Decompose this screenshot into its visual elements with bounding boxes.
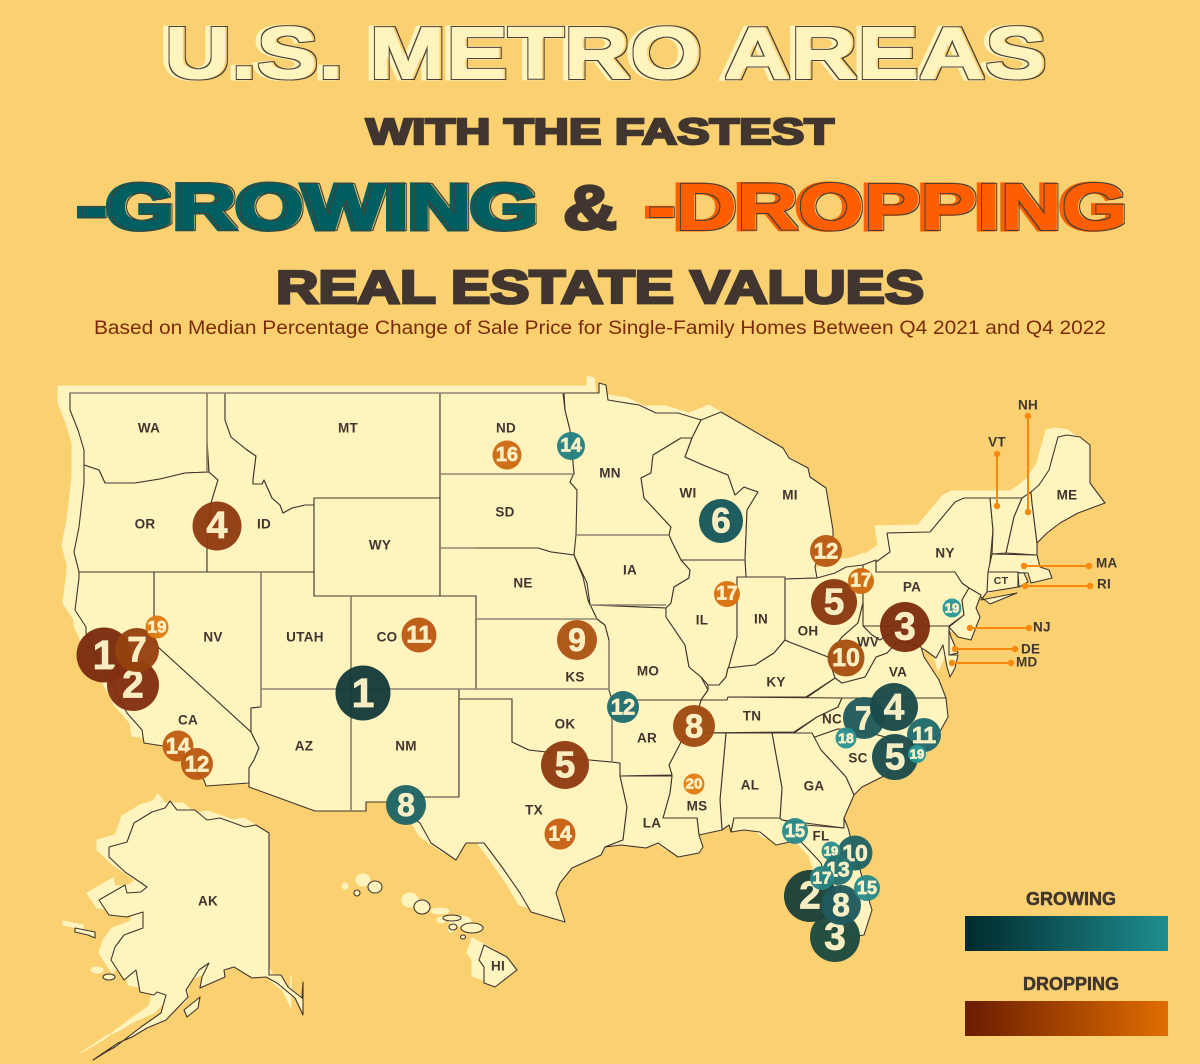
- dropping metro markers: [76, 440, 930, 850]
- dropping metro markers: 12: [814, 538, 838, 564]
- state labels: MO: [637, 664, 659, 678]
- growing metro markers: 12: [611, 694, 635, 720]
- growing metro markers: 11: [912, 722, 936, 748]
- state labels: OR: [135, 516, 155, 532]
- growing metro markers: 13: [826, 858, 850, 882]
- state labels: AK: [198, 894, 218, 908]
- US state map: [70, 383, 1105, 1060]
- growing metro markers: 1: [352, 670, 374, 716]
- state labels: CA: [178, 712, 198, 728]
- state labels: MT: [338, 420, 358, 436]
- state labels: OK: [555, 716, 575, 732]
- dropping metro markers: 19: [148, 618, 166, 636]
- dropping metro markers: 9: [568, 622, 586, 658]
- heading: -growing: -GROWING: [80, 171, 540, 243]
- state labels: WV: [857, 634, 879, 650]
- state labels: UTAH: [286, 630, 324, 644]
- dropping metro markers: 20: [686, 776, 702, 792]
- heading: real estate values: REAL ESTATE VALUES: [276, 261, 924, 313]
- state labels: KS: [565, 670, 585, 684]
- growing metro markers: 19: [945, 600, 959, 616]
- growing metro markers: 3: [824, 916, 846, 958]
- northeast pointer labels: [988, 398, 1118, 670]
- northeast pointer labels: VT: [988, 434, 1006, 450]
- state labels: IA: [623, 562, 637, 578]
- dropping metro markers: 7: [127, 630, 147, 670]
- heading: ampersand: &: [563, 174, 617, 243]
- state labels: ME: [1057, 488, 1077, 502]
- growing metro markers: 8: [397, 787, 415, 823]
- growing metro markers: 17: [813, 868, 831, 888]
- heading: -growing: -GROWING: [77, 171, 537, 243]
- northeast pointer labels: MD: [1016, 654, 1038, 670]
- dropping metro markers: 4: [206, 505, 228, 547]
- northeast pointer labels: MA: [1096, 556, 1118, 570]
- title: U.S. Metro Areas: U.S. METRO AREAS: [165, 14, 1047, 94]
- dropping metro markers: 16: [496, 444, 518, 466]
- thicker state borders: [70, 393, 669, 811]
- northeast pointer labels: RI: [1097, 576, 1111, 592]
- state labels: TX: [525, 802, 543, 818]
- legend: growing: [965, 889, 1168, 951]
- state labels: MN: [599, 466, 621, 480]
- growing metro markers: [336, 432, 962, 962]
- state labels: AZ: [295, 738, 313, 754]
- state labels: FL: [812, 828, 830, 844]
- growing metro markers: 4: [884, 686, 905, 728]
- state labels: KY: [766, 674, 786, 690]
- dropping metro markers: 5: [824, 582, 844, 622]
- state labels: LA: [643, 816, 661, 830]
- state labels: WA: [138, 420, 160, 436]
- state labels: GA: [804, 778, 824, 794]
- growing metro markers: 5: [885, 736, 905, 778]
- state labels: NE: [513, 576, 533, 590]
- northeast pointer labels: NH: [1018, 398, 1038, 412]
- growing metro markers: 6: [711, 502, 731, 540]
- state labels: NV: [203, 630, 223, 644]
- growing metro markers: 18: [838, 730, 854, 746]
- state labels: PA: [903, 580, 921, 594]
- dropping metro markers: 2: [122, 664, 144, 706]
- dropping metro markers: 10: [832, 644, 860, 672]
- growing metro markers: 8: [832, 887, 850, 923]
- state labels: AR: [637, 730, 657, 746]
- state labels: IL: [696, 612, 708, 628]
- state labels: SD: [495, 504, 515, 520]
- growing metro markers: 15: [857, 878, 877, 898]
- dropping metro markers: 17: [716, 584, 738, 604]
- state labels: MS: [687, 798, 707, 814]
- heading: -dropping: -DROPPING: [648, 171, 1128, 243]
- state labels: TN: [743, 708, 761, 724]
- state labels: IN: [754, 612, 768, 626]
- subtitle: Based on Median Percentage Change of Sale Price for Single-Family Homes Between Q4 2021 and Q4 2022: [94, 318, 1106, 339]
- legend: dropping: [965, 974, 1168, 1036]
- state labels: WY: [369, 538, 391, 552]
- legend: dropping: DROPPING: [1023, 974, 1119, 994]
- state labels: MI: [782, 488, 798, 502]
- dropping metro markers: 11: [406, 622, 432, 648]
- northeast pointer lines: [949, 413, 1093, 666]
- state labels: ID: [257, 516, 271, 532]
- dropping metro markers: 8: [685, 708, 703, 744]
- dropping metro markers: 14: [166, 734, 191, 758]
- growing metro markers: 15: [785, 821, 805, 841]
- state labels: HI: [491, 958, 505, 974]
- northeast pointer labels: NJ: [1033, 620, 1051, 634]
- state labels: [135, 420, 1077, 974]
- northeast pointer labels: DE: [1021, 642, 1040, 656]
- state labels: CO: [377, 630, 397, 644]
- state labels: WI: [679, 486, 697, 500]
- heading: -dropping: -DROPPING: [645, 171, 1125, 243]
- dropping metro markers: 1: [93, 632, 115, 678]
- growing metro markers: 19: [824, 844, 838, 858]
- growing metro markers: 10: [842, 840, 868, 866]
- state labels: CT: [994, 575, 1009, 587]
- state labels: OH: [798, 624, 818, 638]
- dropping metro markers: 17: [850, 570, 872, 592]
- state labels: AL: [741, 778, 759, 792]
- state labels: VA: [889, 664, 907, 680]
- dropping metro markers: 5: [555, 744, 575, 786]
- dropping metro markers: 12: [185, 752, 209, 776]
- heading: with the fastest: WITH THE FASTEST: [366, 111, 834, 152]
- state labels: NM: [395, 738, 417, 754]
- state labels: NC: [822, 712, 842, 726]
- map halo: [58, 376, 1093, 1053]
- title: U.S. Metro Areas: U.S. METRO AREAS: [161, 14, 1043, 94]
- dropping metro markers: 3: [894, 606, 916, 648]
- growing metro markers: 14: [560, 436, 582, 456]
- legend: growing: GROWING: [1026, 889, 1116, 909]
- state labels: NY: [935, 546, 955, 560]
- growing metro markers: 7: [855, 700, 873, 736]
- growing metro markers: 19: [910, 746, 924, 762]
- growing metro markers: 2: [799, 874, 821, 918]
- dropping metro markers: 14: [548, 822, 572, 846]
- state labels: SC: [848, 750, 868, 766]
- state labels: ND: [496, 420, 516, 436]
